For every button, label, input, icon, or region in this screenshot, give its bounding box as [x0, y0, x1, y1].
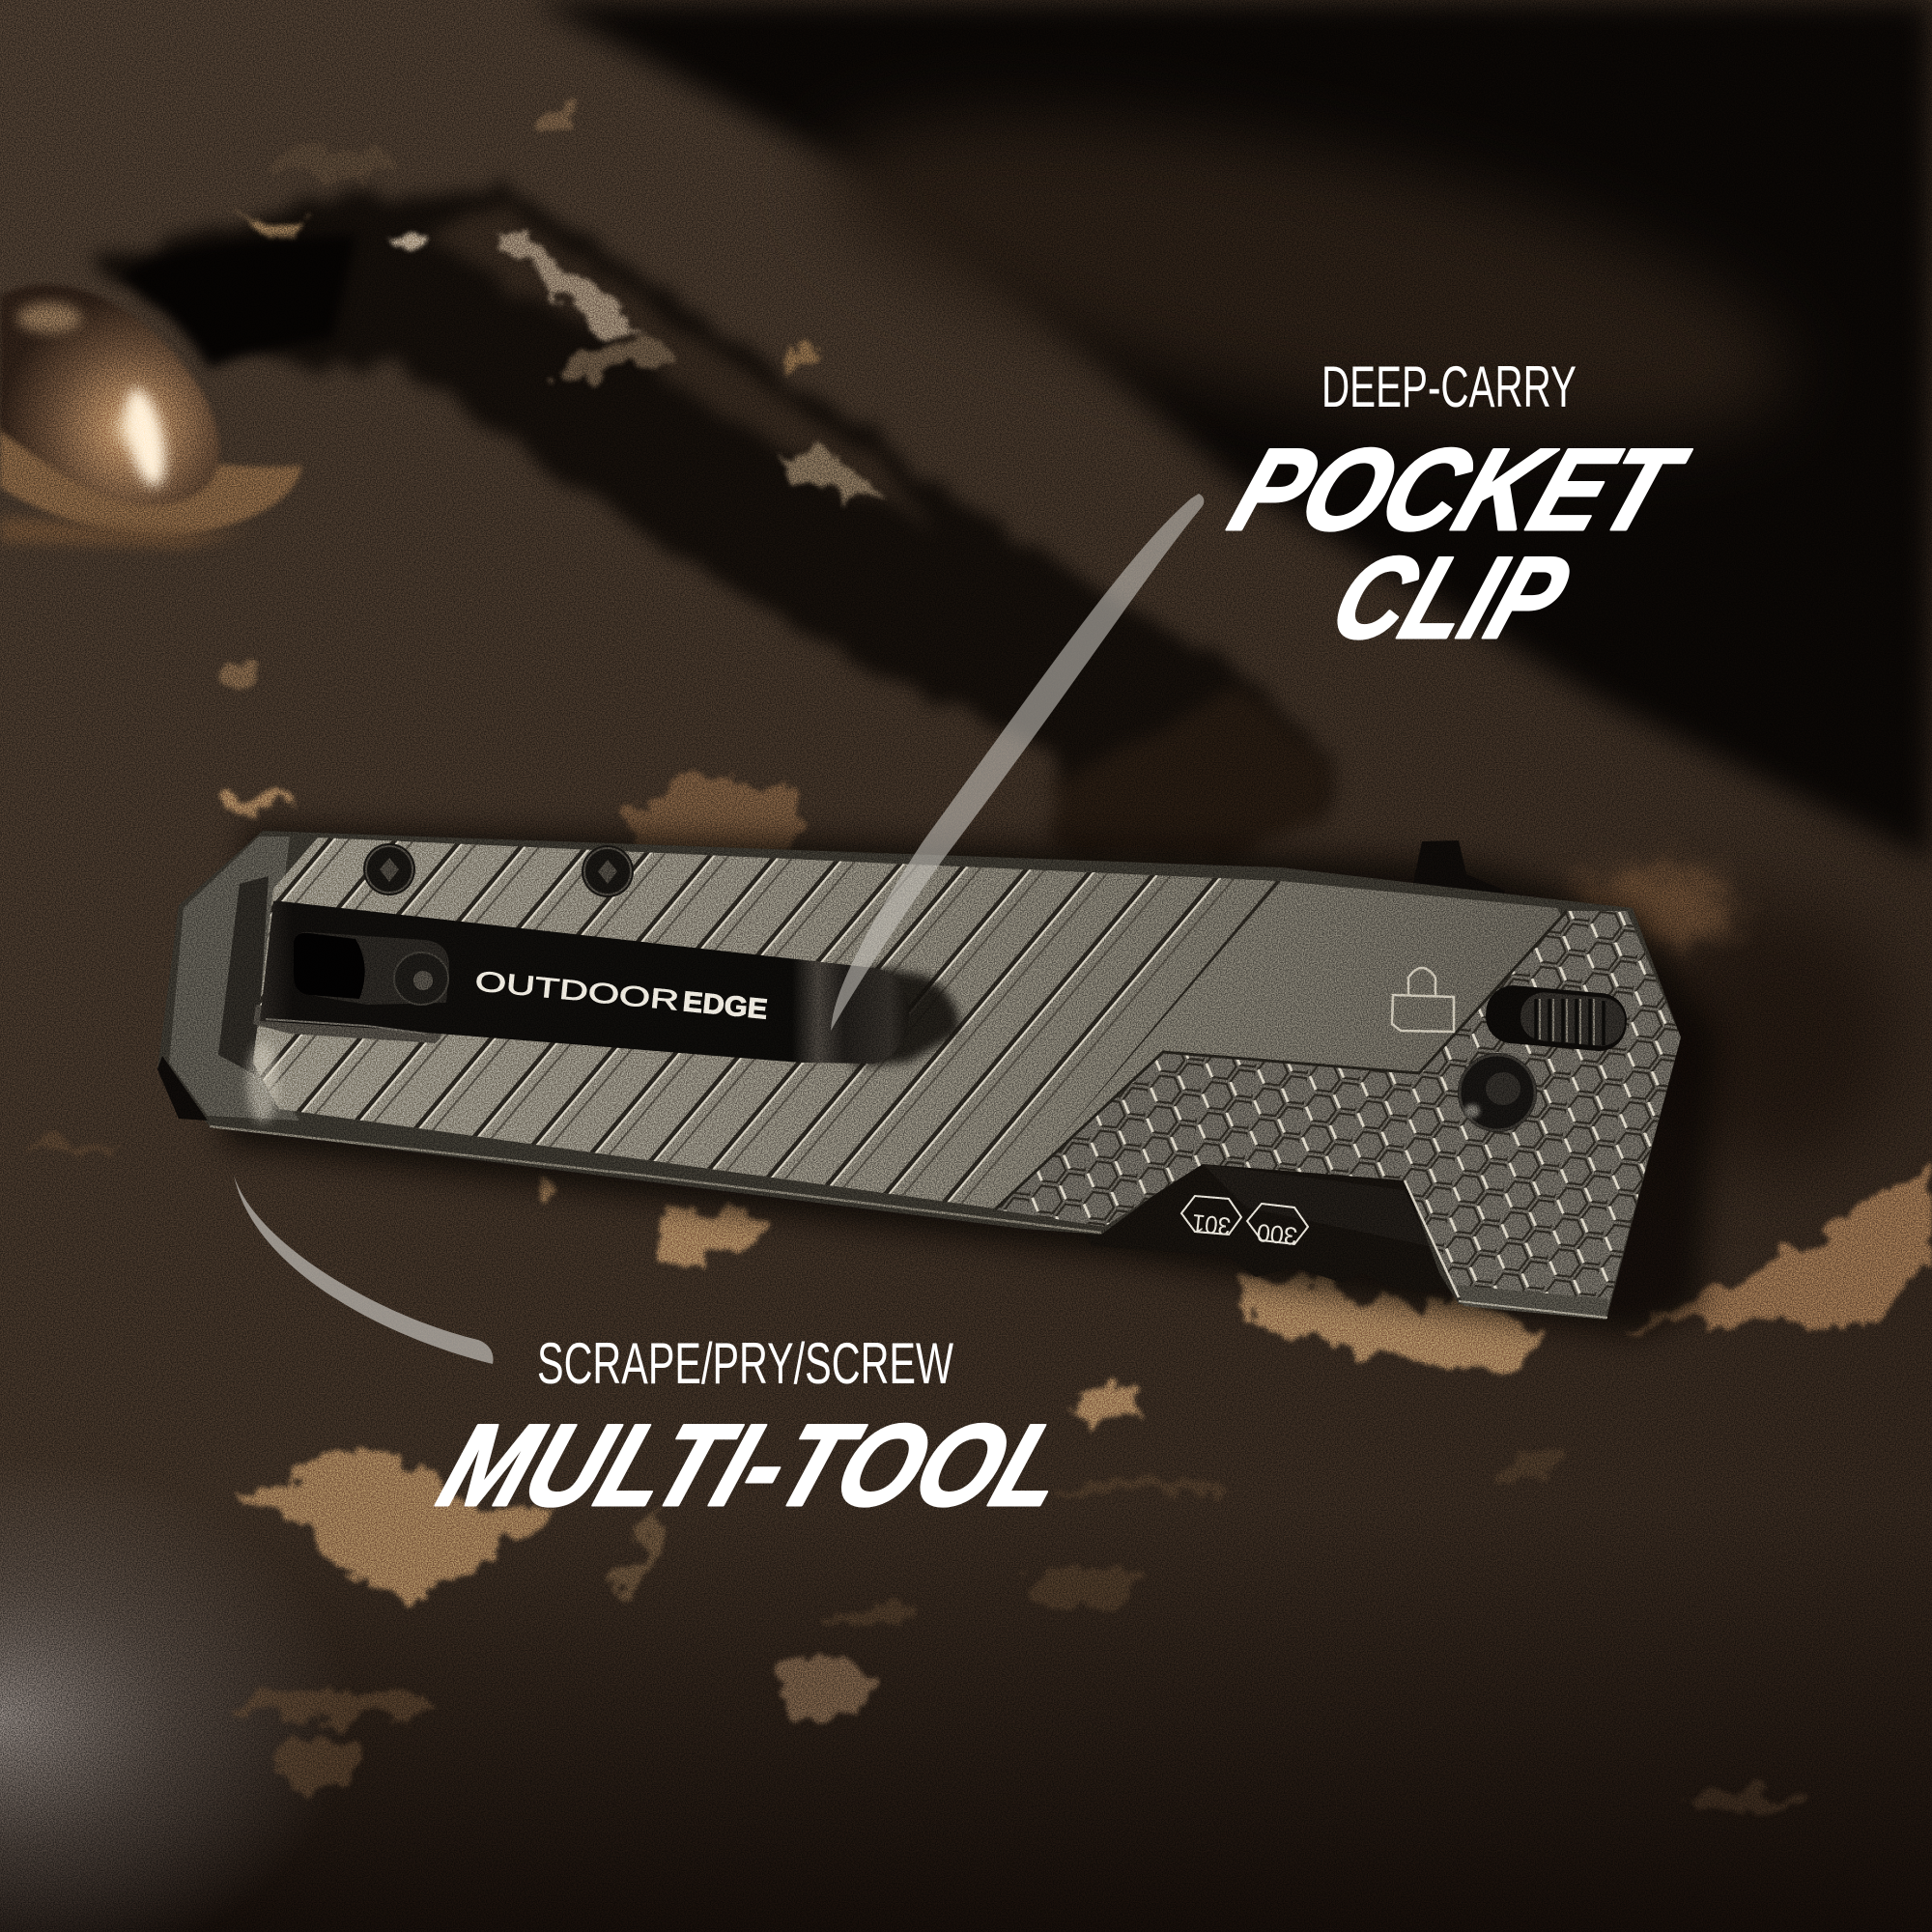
knife: lock slider: [1484, 983, 1629, 1053]
pocket clip: underside bracket: [253, 1005, 442, 1043]
knife: left cap: [169, 837, 299, 1121]
heading: clip: CLIP: [1316, 534, 1583, 663]
knife cast shadow: [222, 826, 1719, 1337]
pointer line: multi-tool: [234, 1175, 493, 1364]
subheading: scrape/pry/screw: SCRAPE/PRY/SCREW: [537, 1331, 953, 1396]
knife: rear tab: [1410, 840, 1505, 903]
pocket clip: brand text: OUTDOOR: [473, 966, 680, 1017]
knife: pivot screw: [1458, 1053, 1537, 1132]
background: shadow at right of knife: [1651, 899, 1897, 1171]
pocket clip: brand text: [473, 966, 769, 1026]
pocket clip: [253, 901, 959, 1066]
knife: blade marking 300: 300: [1255, 1218, 1298, 1251]
pocket clip: body: [260, 901, 909, 1064]
pocket clip: dark hole: [294, 933, 365, 999]
knife: corner tip: [157, 1056, 208, 1121]
pointer line: pocket clip: [831, 494, 1204, 1031]
label: scrape pry screw multi-tool: [424, 1331, 1086, 1530]
knife: blade marking 300: [1247, 1204, 1308, 1251]
subheading: deep-carry: DEEP-CARRY: [1321, 355, 1577, 419]
knife: blade marking 301: [1181, 1196, 1241, 1241]
knife: lock icon: [1392, 968, 1454, 1032]
knife: diagonal grooves: [253, 838, 1281, 1208]
knife: blade spine below handle: [1082, 1150, 1468, 1304]
pocket clip: cast shadow: [850, 966, 959, 1066]
knife: [157, 831, 1681, 1320]
knife: cap highlight: [247, 1041, 278, 1122]
heading: pocket: POCKET: [1215, 426, 1701, 554]
pocket clip: brand text: EDGE: [681, 986, 769, 1026]
background: dark upper right: [529, 0, 1932, 863]
knife: handle screw right: [582, 845, 634, 897]
pocket clip: screw: [394, 952, 448, 1005]
knife: lower edge highlight: [210, 1126, 1101, 1233]
background: far surface: [798, 54, 1814, 500]
handle: worn scratches: [241, 215, 887, 505]
knife: handle screw left: [363, 843, 415, 895]
pocket clip: cut-out: [294, 932, 449, 1005]
knife: left slot: [218, 876, 269, 1075]
label: deep-carry pocket clip: [1215, 355, 1701, 663]
knife: textured grip: [995, 911, 1681, 1320]
knife: blade marking 301: 301: [1190, 1208, 1232, 1241]
handle: copper rivet: [0, 234, 357, 549]
knife: main face: [253, 838, 1567, 1208]
heading: multi-tool: MULTI-TOOL: [424, 1402, 1086, 1530]
knife: handle frame: [157, 831, 1681, 1320]
pocket clip: lower edge shine: [266, 1019, 425, 1034]
background: pale haze lower left: [0, 1454, 640, 1932]
background: lower shading: [0, 1503, 1932, 1932]
handle: dark strap: [86, 185, 1337, 860]
